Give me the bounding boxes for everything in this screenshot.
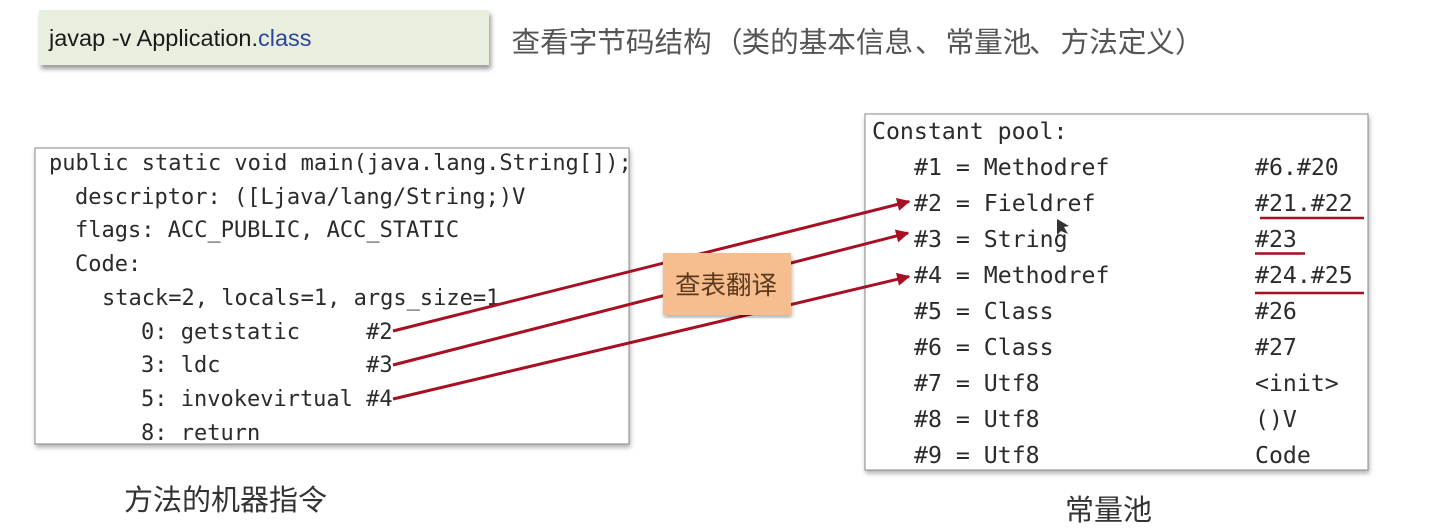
panel: constant pool: #9 = Utf8	[914, 442, 1040, 469]
panel: constant pool: #23	[1255, 226, 1297, 253]
panel: method machine instructions: flags: ACC_PUBLIC, ACC_STATIC	[75, 218, 459, 243]
heading: bytecode structure: 、	[915, 27, 944, 59]
panel: constant pool: #4 = Methodref	[914, 262, 1109, 289]
panel: constant pool: #5 = Class	[914, 298, 1054, 325]
arrow: #2 to Fieldref	[393, 202, 909, 331]
cursor icon	[1057, 219, 1069, 235]
panel: method machine instructions: 8: return	[141, 421, 260, 446]
panel: constant pool: #7 = Utf8	[914, 370, 1040, 397]
arrow: #4 to Methodref	[393, 276, 909, 399]
underline: #24.#25	[1255, 292, 1364, 294]
heading: bytecode structure: 常量池	[946, 27, 1031, 59]
panel: constant pool: Code	[1255, 442, 1311, 469]
panel: constant pool: #6 = Class	[914, 334, 1054, 361]
heading: bytecode structure: 类的基本信息	[742, 27, 913, 59]
panel: method machine instructions: Code:	[75, 252, 141, 277]
command box	[39, 10, 489, 65]
panel: constant pool: ()V	[1255, 406, 1297, 433]
panel: constant pool: <init>	[1255, 370, 1339, 397]
arrow: #3 to String	[393, 233, 908, 365]
heading: bytecode structure: 方法定义	[1060, 27, 1175, 59]
caption: method machine instructions: 方法的机器指令	[124, 484, 327, 517]
caption: constant pool: 常量池	[1065, 494, 1152, 527]
callout: table lookup translation	[663, 253, 791, 315]
panel: method machine instructions: descriptor: ([Ljava/lang/String;)V	[75, 185, 525, 210]
command box: javap -v Application.class	[48, 25, 312, 51]
panel: constant pool: #27	[1255, 334, 1297, 361]
callout: table lookup translation: 查表翻译	[675, 272, 777, 300]
panel: constant pool: #3 = String	[914, 226, 1068, 253]
panel: constant pool: Constant pool:	[872, 118, 1067, 145]
panel: method machine instructions	[35, 148, 632, 446]
panel: method machine instructions: 0: getstatic #2	[141, 320, 393, 345]
panel: constant pool: #24.#25	[1255, 262, 1353, 289]
underline: #21.#22	[1260, 217, 1364, 219]
panel: constant pool: #1 = Methodref	[914, 154, 1109, 181]
panel: constant pool: #21.#22	[1255, 190, 1353, 217]
panel: method machine instructions: 5: invokevirtual #4	[141, 387, 393, 412]
panel: constant pool: #2 = Fieldref	[914, 190, 1095, 217]
heading: bytecode structure: （	[714, 27, 743, 59]
heading: bytecode structure: 、	[1029, 27, 1058, 59]
heading: bytecode structure: 查看字节码结构	[512, 27, 712, 59]
panel: method machine instructions: stack=2, locals=1, args_size=1	[102, 286, 499, 311]
panel: constant pool	[865, 114, 1368, 470]
panel: constant pool: #6.#20	[1255, 154, 1339, 181]
panel: method machine instructions: 3: ldc #3	[141, 353, 393, 378]
panel: constant pool: #26	[1255, 298, 1297, 325]
panel: method machine instructions: public static void main(java.lang.String[]);	[49, 151, 632, 176]
panel: constant pool: #8 = Utf8	[914, 406, 1040, 433]
underline: #23	[1255, 252, 1305, 255]
heading: bytecode structure: ）	[1175, 27, 1204, 59]
